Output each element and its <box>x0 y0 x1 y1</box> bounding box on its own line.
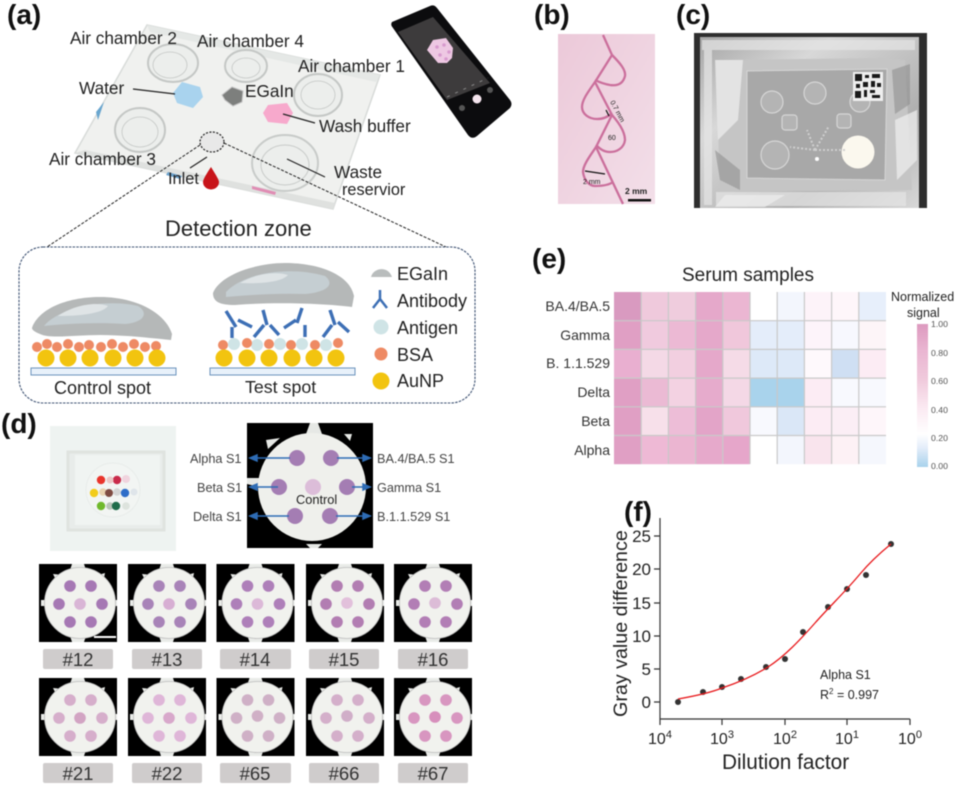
labeled chip image <box>247 423 373 548</box>
device card in pouch <box>747 69 887 180</box>
colorbar legend: signal <box>907 306 940 320</box>
sample name tags: #14 <box>240 649 270 670</box>
sample name tags: #16 <box>418 649 448 670</box>
sample #15 <box>306 564 384 642</box>
dimension annotations: 2 mm <box>583 179 601 186</box>
sample #16 <box>394 564 472 642</box>
dimension annotations: 60 <box>608 135 616 142</box>
dimension annotations <box>583 100 625 186</box>
sample name tags: #21 <box>63 763 93 784</box>
heatmap row labels: Beta <box>581 413 610 429</box>
chamber and reagent labels: Waste <box>334 162 382 182</box>
y axis title: Gray value difference <box>610 530 632 717</box>
heatmap row labels: B. 1.1.529 <box>546 355 610 371</box>
sample #66 <box>306 678 384 756</box>
spot labels <box>190 452 455 524</box>
QR code <box>853 72 883 101</box>
sample name tags: #66 <box>329 763 359 784</box>
chamber and reagent labels: Water <box>79 78 124 98</box>
teardrop channels <box>582 35 625 204</box>
y axis tick labels: 0 <box>642 693 651 712</box>
spot labels: BA.4/BA.5 S1 <box>377 452 455 466</box>
smartphone photo <box>391 5 512 138</box>
air chamber 3 well <box>115 108 165 152</box>
colorbar legend <box>891 290 954 471</box>
y axis tick labels: 15 <box>632 594 651 613</box>
fit curve <box>678 544 891 699</box>
legend: Antigen <box>397 318 458 338</box>
water pad <box>173 82 203 108</box>
heatmap row labels: BA.4/BA.5 <box>545 298 610 314</box>
sample #22 <box>128 678 206 756</box>
colorbar legend: 0.00 <box>931 461 948 471</box>
colorbar legend: 0.80 <box>931 348 948 358</box>
sample #14 <box>216 564 294 642</box>
legend: EGaIn <box>397 264 448 284</box>
colorbar legend: Normalized <box>891 290 954 304</box>
chamber and reagent labels <box>49 28 411 199</box>
control spot illustration <box>31 297 176 375</box>
sample #67 <box>394 678 472 756</box>
fit annotation <box>820 668 879 702</box>
spot labels: B.1.1.529 S1 <box>377 510 450 524</box>
panel: (e) heatmap <box>532 243 954 471</box>
x axis tick labels: 4 <box>666 729 672 741</box>
fit annotation: 2 <box>829 687 834 696</box>
control label: Control <box>296 492 337 507</box>
sample name tags: #65 <box>240 763 270 784</box>
heatmap title: Serum samples <box>682 265 814 286</box>
fit annotation: = 0.997 <box>833 688 879 702</box>
x axis tick labels <box>648 729 922 748</box>
sample name tags: #15 <box>329 649 359 670</box>
test spot illustration <box>210 263 355 375</box>
x axis title: Dilution factor <box>722 751 849 774</box>
y axis tick labels: 10 <box>632 627 651 646</box>
spot labels: Delta S1 <box>193 510 242 524</box>
legend <box>371 264 467 391</box>
spot labels: Alpha S1 <box>190 452 242 466</box>
air chamber 4 well <box>225 50 267 82</box>
pink micrograph background <box>558 34 655 204</box>
panel: (d) detection chips <box>1 408 472 784</box>
test spot label: Test spot <box>245 377 316 397</box>
sample #65 <box>216 678 294 756</box>
chamber and reagent labels: Air chamber 1 <box>298 56 405 76</box>
detection zone box <box>19 247 475 403</box>
panel: (b) channel micrograph <box>534 0 655 204</box>
sample #21 <box>39 678 117 756</box>
chamber and reagent labels: Air chamber 3 <box>49 149 156 169</box>
x axis tick labels: 0 <box>916 729 922 741</box>
heatmap row labels <box>545 298 610 458</box>
detection zone circle <box>200 132 224 152</box>
y axis tick labels: 25 <box>632 527 651 546</box>
colorbar legend: 0.20 <box>931 433 948 443</box>
x axis tick labels: 1 <box>853 729 859 741</box>
air chamber 2 well <box>148 44 198 82</box>
chip photo with colored reagents <box>50 426 176 551</box>
blood drop icon <box>203 167 219 190</box>
detection zone heading: Detection zone <box>165 216 312 241</box>
heatmap row labels: Gamma <box>560 327 610 343</box>
y axis tick labels <box>632 527 651 712</box>
x axis tick labels: 10 <box>773 731 791 748</box>
fit annotation: R <box>820 688 829 702</box>
data points <box>675 541 894 705</box>
chamber and reagent labels: EGaIn <box>245 81 294 101</box>
zoom projection lines <box>47 143 446 247</box>
chamber and reagent labels: reservior <box>342 181 406 199</box>
panel label f: (f) <box>624 496 652 527</box>
panel label e: (e) <box>532 243 566 274</box>
sample name tags: #13 <box>152 649 182 670</box>
y axis tick labels: 20 <box>632 560 651 579</box>
sample #13 <box>128 564 206 642</box>
chamber and reagent labels: Air chamber 2 <box>70 28 177 48</box>
sample name tags: #12 <box>63 649 93 670</box>
heatmap row labels: Delta <box>577 384 610 400</box>
control spot label: Control spot <box>54 378 151 398</box>
fit annotation: Alpha S1 <box>820 668 871 682</box>
x axis tick labels: 10 <box>710 731 728 748</box>
panel: (a) device schematic <box>7 0 512 403</box>
x axis tick labels: 10 <box>835 731 853 748</box>
air chamber 1 well <box>294 74 342 116</box>
dimension annotations: 0.7 mm <box>608 100 625 124</box>
colorbar legend: 0.60 <box>931 376 948 386</box>
EGaIn pad <box>222 87 243 106</box>
foil pouch <box>694 33 927 208</box>
colorbar legend: 0.40 <box>931 405 948 415</box>
chamber and reagent labels: Wash buffer <box>319 116 411 136</box>
sample name tags: #67 <box>418 763 448 784</box>
legend: BSA <box>397 345 433 365</box>
sample name tags <box>43 649 468 784</box>
scale bar 2 mm <box>625 186 651 202</box>
panel label d: (d) <box>1 408 37 439</box>
panel: (f) dilution curve <box>610 496 922 774</box>
spot labels: Beta S1 <box>197 481 242 495</box>
y axis tick labels: 5 <box>642 660 651 679</box>
wash buffer pad <box>263 103 293 124</box>
leader lines <box>133 89 325 177</box>
legend: AuNP <box>397 371 444 391</box>
colorbar legend: 1.00 <box>931 319 948 329</box>
x axis tick labels: 10 <box>898 731 916 748</box>
sample name tags: #22 <box>152 763 182 784</box>
waste reservoir well <box>252 135 318 191</box>
sample #12 <box>39 564 117 642</box>
x axis tick labels: 3 <box>728 729 734 741</box>
heatmap row labels: Alpha <box>574 442 610 458</box>
microfluidic device <box>75 25 380 209</box>
x axis tick labels: 2 <box>791 729 797 741</box>
arrows to spot labels <box>250 455 370 519</box>
chamber and reagent labels: Inlet <box>168 170 199 188</box>
scale bar 2 mm: 2 mm <box>625 186 648 196</box>
panel: (c) packaged device photo <box>676 0 927 208</box>
heatmap cells <box>614 292 886 464</box>
legend: Antibody <box>397 291 467 311</box>
plot axes <box>654 518 910 725</box>
chamber and reagent labels: Air chamber 4 <box>197 31 304 51</box>
x axis tick labels: 10 <box>648 731 666 748</box>
spot labels: Gamma S1 <box>377 481 441 495</box>
